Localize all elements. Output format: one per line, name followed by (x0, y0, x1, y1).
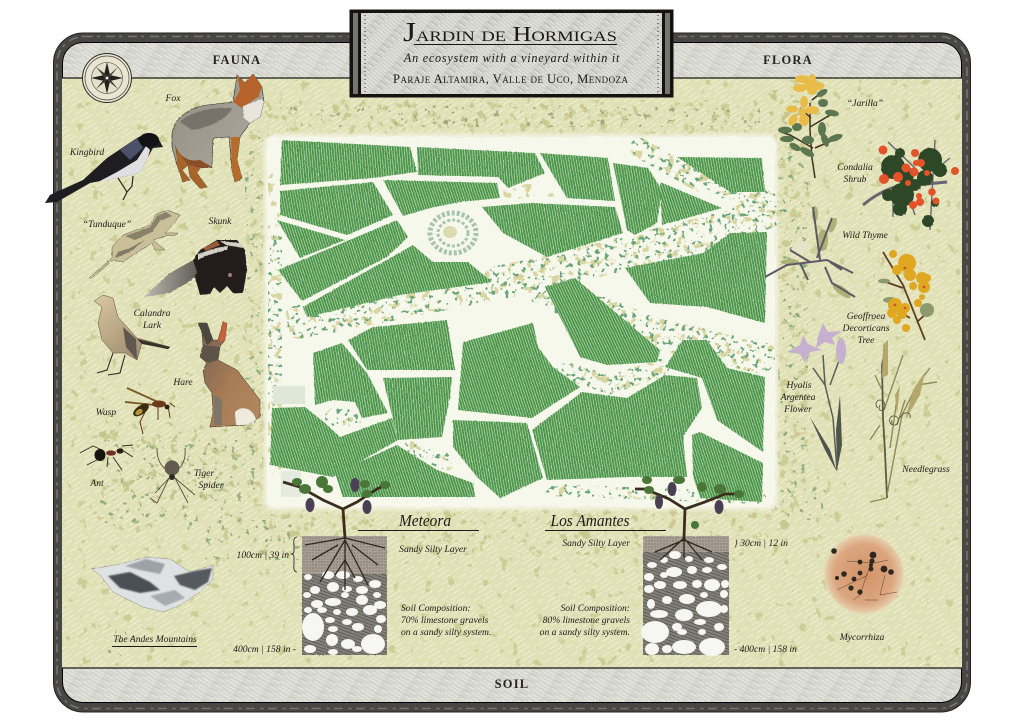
text: los amantes soil composition: 80% limestone gravels (543, 615, 630, 626)
label: fox: Fox (165, 93, 181, 104)
heading: fauna: FAUNA (213, 53, 261, 67)
label: condalia shrub: Shrub (844, 174, 867, 185)
small grey building patches (273, 386, 305, 497)
label: geoffroea decorticans tree: Decorticans (842, 323, 890, 334)
illustration: hare (198, 322, 260, 427)
illustration: needlegrass (870, 340, 937, 502)
grape vine: meteora (283, 476, 390, 538)
label: hyalis argentea flower: Argentea (780, 392, 816, 403)
illustration: wild thyme (765, 206, 855, 301)
label: geoffroea decorticans tree: Tree (858, 335, 875, 346)
text: meteora soil composition: on a sandy silty system. (401, 627, 491, 638)
label: needlegrass: Needlegrass (901, 464, 950, 475)
map halo (264, 134, 778, 510)
illustration: wasp (125, 388, 175, 434)
underline: meteora (358, 530, 479, 532)
grape vine: los amantes (635, 476, 744, 538)
text: los amantes soil composition: Soil Composition: (560, 603, 630, 614)
illustration: tiger spider (150, 448, 195, 503)
soil column: meteora (302, 535, 387, 655)
label: jarilla: “Jarilla” (847, 98, 883, 109)
map speckled tracks: green (275, 148, 770, 498)
vineyard plots (270, 140, 767, 502)
text: meteora soil composition: Soil Composition: (401, 603, 471, 614)
label: mycorrhiza: Mycorrhiza (839, 632, 884, 643)
panel: main olive paper area (62, 78, 962, 668)
illustration: hyalis argentea flower (787, 323, 846, 472)
illustration: ant (80, 445, 133, 470)
header and footer gray bands (63, 43, 961, 702)
label: tiger spider: Tiger (194, 468, 214, 479)
label: hyalis argentea flower: Hyalis (785, 380, 812, 391)
heading: los amantes: Los Amantes (550, 511, 630, 530)
heading: flora: FLORA (763, 53, 813, 67)
heading: meteora: Meteora (398, 511, 451, 530)
text: meteora soil composition: 70% limestone gravels (401, 615, 489, 626)
label: ant: Ant (89, 478, 104, 489)
label: condalia shrub: Condalia (837, 162, 873, 173)
illustration: tunduque (89, 210, 180, 278)
map base (267, 137, 775, 507)
title underline (414, 44, 617, 46)
label: meteora 400cm depth: 400cm | 158 in - (233, 644, 296, 655)
soil column: los amantes (641, 535, 729, 656)
illustration: skunk (144, 240, 247, 297)
text: los amantes soil composition: on a sandy silty system. (540, 627, 630, 638)
label: los amantes 400cm depth: - 400cm | 158 in (734, 644, 797, 655)
label: meteora 100cm depth: 100cm | 39 in (237, 550, 289, 561)
bracket: meteora top layer (291, 537, 297, 572)
illustration: geoffroea tree (878, 250, 934, 340)
label: skunk: Skunk (209, 216, 232, 227)
illustration: andes mountains (92, 557, 213, 612)
label: meteora sandy layer: Sandy Silty Layer (399, 544, 467, 555)
illustration: jarilla (778, 74, 844, 178)
label: los amantes sandy layer: Sandy Silty Layer (562, 538, 630, 549)
title text: Jardin de Hormigas (403, 17, 617, 47)
label: kingbird: Kingbird (69, 147, 104, 158)
underline: los amantes (545, 530, 666, 532)
label: wasp: Wasp (96, 407, 116, 418)
underline: andes (112, 646, 197, 648)
label: hyalis argentea flower: Flower (783, 404, 812, 415)
illustration: kingbird (45, 133, 163, 203)
label: los amantes 30cm depth: } 30cm | 12 in (734, 538, 788, 549)
label: tunduque: “Tunduque” (83, 219, 131, 230)
panel: vineyard map (264, 134, 778, 510)
circular garden (430, 213, 476, 253)
label: geoffroea decorticans tree: Geoffroea (847, 311, 885, 322)
heading: soil: SOIL (495, 677, 529, 691)
label: hare: Hare (172, 377, 193, 388)
label: calandra lark: Calandra (134, 308, 171, 319)
location: Paraje Altamira, Valle de Uco, Mendoza (393, 72, 628, 86)
map speckled tracks: olive (275, 148, 770, 498)
icon: compass (82, 54, 132, 102)
title plaque (350, 10, 674, 98)
olive and green speckles across the paper (64, 80, 960, 666)
illustration: condalia shrub (863, 140, 959, 230)
illustration: calandra lark (94, 295, 170, 375)
illustration: fox (172, 74, 264, 188)
subtitle: An ecosystem with a vineyard within it (403, 51, 620, 65)
label: wild thyme: Wild Thyme (842, 230, 889, 241)
illustration: mycorrhiza (823, 533, 905, 615)
label: calandra lark: Lark (142, 320, 162, 331)
label: andes mountains: The Andes Mountains (113, 634, 197, 645)
label: tiger spider: Spider (198, 480, 224, 491)
